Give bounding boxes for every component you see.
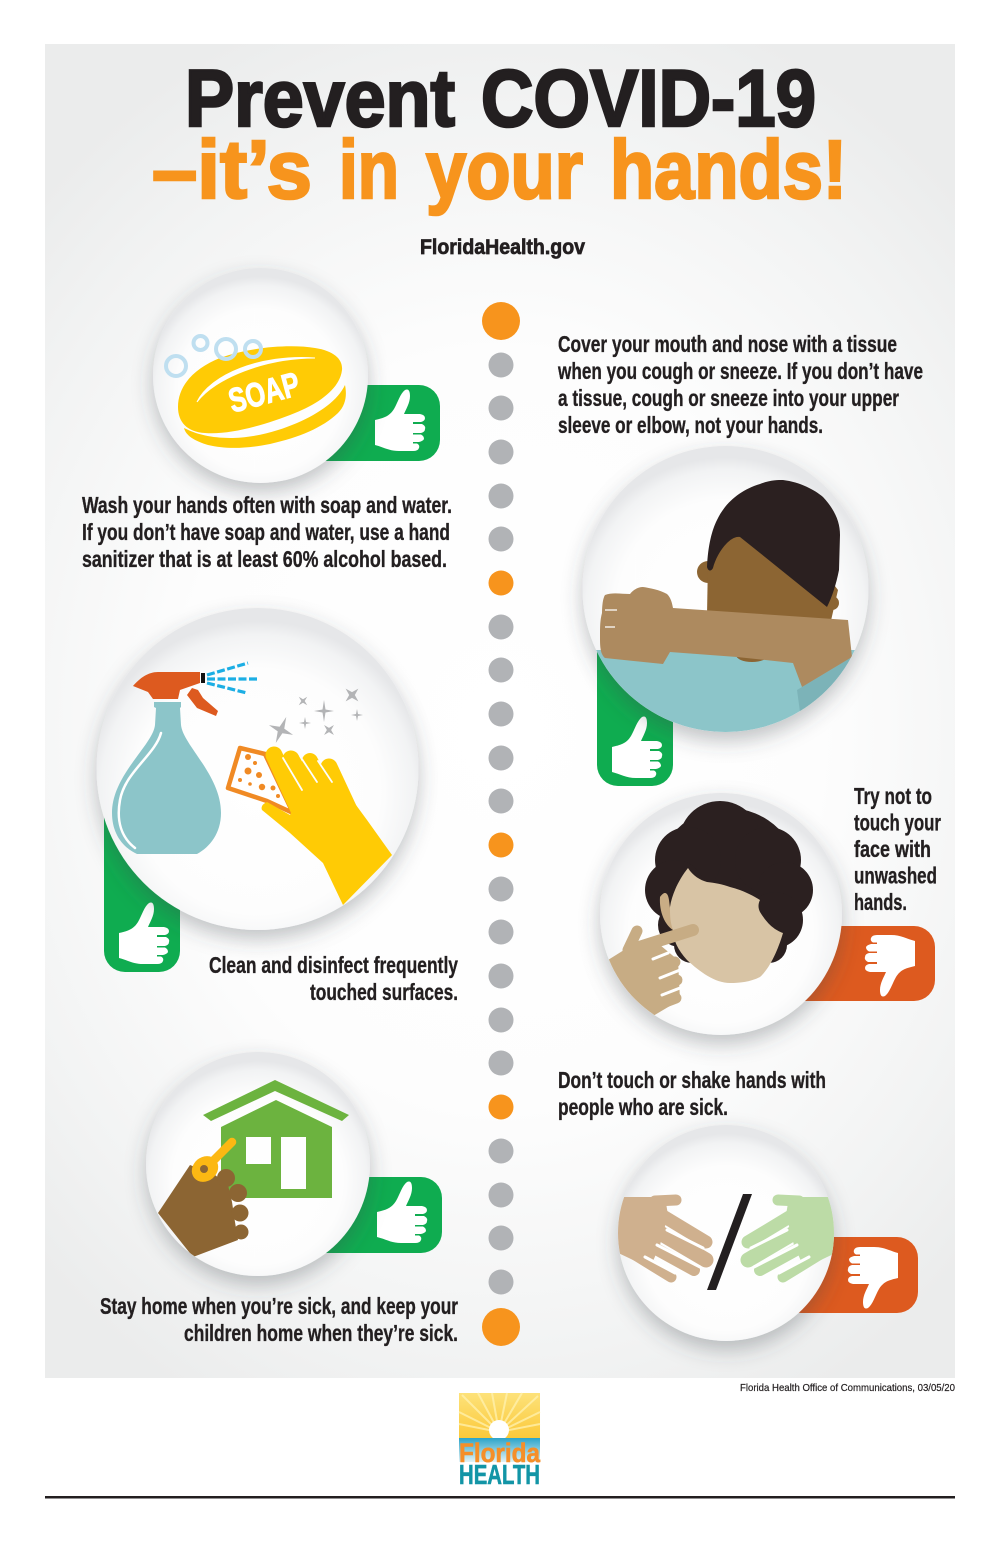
- text: cover your mouth: [557, 331, 923, 438]
- panel: stay home: [146, 1052, 442, 1276]
- text: stay home: Stay home when you’re sick, and keep your: [100, 1293, 458, 1319]
- icon: sponge: [228, 748, 293, 813]
- text: cover your mouth: Cover your mouth and nose with a tissue: [558, 331, 897, 357]
- title: [152, 54, 847, 216]
- disc: [153, 268, 368, 483]
- panel: shaking hands: [612, 1125, 918, 1341]
- panel background: [45, 44, 955, 1378]
- text: stay home: children home when they’re sick.: [184, 1320, 458, 1346]
- text: cover your mouth: a tissue, cough or sneeze into your upper: [558, 385, 899, 411]
- text: do not shake hands: Don’t touch or shake hands with: [558, 1067, 826, 1093]
- bottom rule: [45, 1496, 955, 1498]
- logo: Florida Health: [459, 1393, 541, 1490]
- text: clean and disinfect: [209, 952, 458, 1005]
- text: clean and disinfect: Clean and disinfect frequently: [209, 952, 458, 978]
- text: wash hands: If you don’t have soap and water, use a hand: [82, 519, 450, 545]
- icon: sparkles: [264, 682, 365, 748]
- text: wash hands: [82, 492, 452, 572]
- title: –it’s: [152, 123, 312, 216]
- disc: [96, 608, 418, 930]
- text: wash hands: Wash your hands often with soap and water.: [82, 492, 452, 518]
- text: do not touch face: touch your: [854, 810, 941, 836]
- disc: [618, 1125, 834, 1341]
- thumbs down badge: [780, 1237, 918, 1313]
- thumbs up badge: [280, 385, 440, 461]
- panel: touching face: [600, 793, 935, 1035]
- icon: slash: [707, 1194, 752, 1290]
- icon: spray bottle: [112, 663, 257, 854]
- text: clean and disinfect: touched surfaces.: [310, 979, 458, 1005]
- icon: soap bar: [166, 336, 346, 448]
- title: hands!: [610, 123, 847, 216]
- thumbs up badge: [290, 1177, 442, 1253]
- icon: beige hand: [612, 1197, 706, 1277]
- text: do not touch face: Try not to: [854, 783, 932, 809]
- thumbs up badge: [597, 620, 673, 786]
- title: in: [339, 123, 399, 216]
- text: stay home: [100, 1293, 458, 1346]
- title: COVID-19: [481, 54, 816, 144]
- text: wash hands: sanitizer that is at least 60% alcohol based.: [82, 546, 447, 572]
- panel: clean and disinfect: [96, 608, 418, 972]
- icon: face touching: [608, 801, 813, 1016]
- text: cover your mouth: sleeve or elbow, not your hands.: [558, 412, 823, 438]
- icon: person coughing into elbow: [596, 480, 855, 732]
- icon: green hand: [748, 1197, 842, 1277]
- thumbs down badge: [780, 926, 935, 1001]
- text: do not touch face: face with: [854, 836, 931, 862]
- panel: cover cough: [582, 446, 870, 786]
- title: Prevent: [185, 54, 455, 144]
- text: do not shake hands: [558, 1067, 826, 1120]
- icon: soap bar: SOAP: [225, 365, 304, 421]
- credit line: Florida Health Office of Communications, 03/05/20: [740, 1382, 955, 1394]
- website: FloridaHealth.gov: [420, 236, 585, 259]
- title: your: [426, 123, 583, 216]
- panel: wash hands: [153, 268, 440, 483]
- logo: Florida Health: Florida: [459, 1438, 541, 1468]
- text: do not touch face: unwashed: [854, 862, 937, 888]
- logo: Florida Health: HEALTH: [459, 1459, 540, 1490]
- thumbs up badge: [104, 780, 180, 972]
- timeline dots: [482, 302, 520, 1346]
- icon: key in hand: [158, 1142, 248, 1257]
- text: do not touch face: hands.: [854, 889, 907, 915]
- icon: yellow glove: [262, 755, 392, 905]
- disc: [146, 1052, 370, 1276]
- text: do not shake hands: people who are sick.: [558, 1094, 728, 1120]
- disc: [600, 793, 842, 1035]
- disc: [582, 446, 868, 732]
- text: do not touch face: [854, 783, 941, 915]
- icon: house: [203, 1080, 349, 1198]
